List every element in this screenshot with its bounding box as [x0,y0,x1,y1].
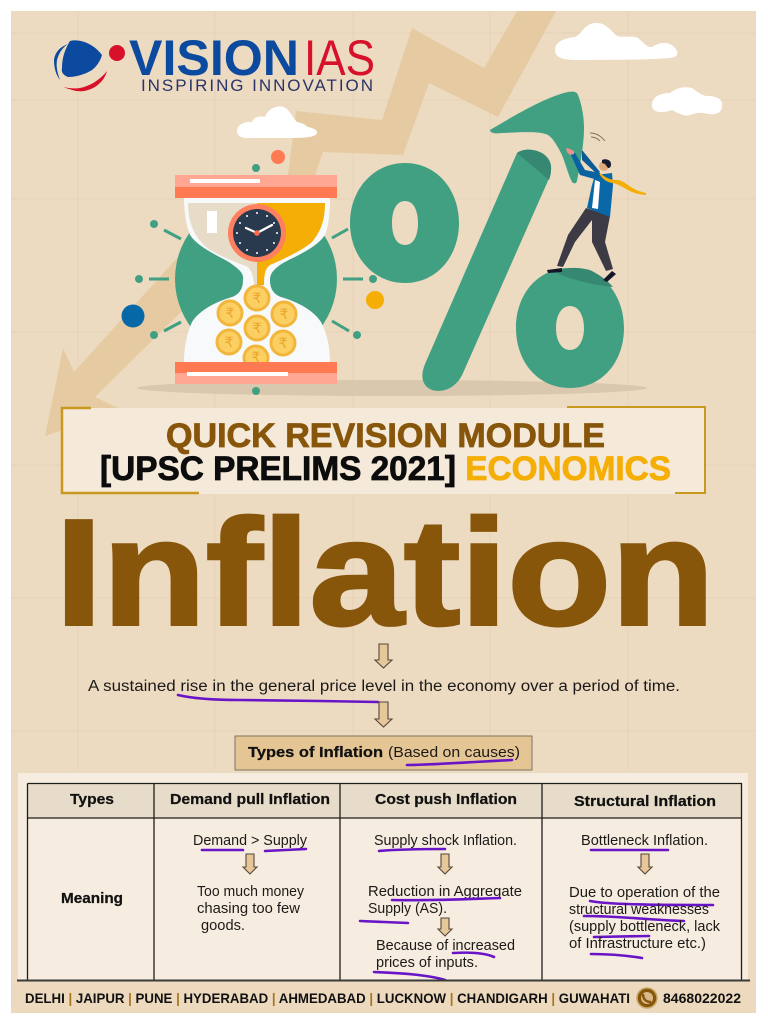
cost push cell: prices of inputs. [376,954,478,971]
glare [207,211,217,233]
structural cell: of Infrastructure etc.) [569,935,706,952]
header: structural: Structural Inflation [574,793,716,810]
title banner [62,407,706,494]
demand pull cell: chasing too few [197,900,300,917]
arrow down 1 [375,644,392,668]
structural cell: Bottleneck Inflation. [581,832,708,849]
definition text: A sustained rise in the general price level in the economy over a period of time. [88,678,680,695]
back arm [582,150,600,174]
coins: ₹ [279,336,288,352]
decorative dots and ticks around hourglass [122,150,384,395]
front arm [570,153,600,180]
types of inflation label [235,736,532,770]
cost push cell: Supply (AS). [368,900,447,917]
demand pull cell: Demand > Supply [193,832,307,849]
structural cell: structural weaknesses [569,901,709,918]
logo: Vision IAS [54,30,375,95]
cost push cell [360,832,522,980]
cost push cell: Reduction in Aggregate [368,883,522,900]
percent slash [422,150,551,391]
cloud top right [555,23,677,60]
icon: phone [637,988,657,1008]
header: types: Types [70,791,114,808]
sand left [188,203,257,285]
arrow tip [490,92,584,183]
structural cell: (supply bottleneck, lack [569,918,720,935]
coins: ₹ [280,307,289,323]
coins [217,286,296,370]
businessman [547,133,646,287]
row label: meaning: Meaning [61,890,123,907]
slash fold shadow [517,150,551,180]
cloud left [237,106,317,138]
header: demand pull: Demand pull Inflation [170,791,330,808]
percent lower circle [516,268,624,388]
heading line 2: [UPSC PRELIMS 2021] ECONOMICS [100,450,671,488]
ground shadow [137,380,647,396]
table backing panel [18,773,748,981]
structural cell [569,832,720,958]
trousers [557,208,613,271]
header: cost push: Cost push Inflation [375,791,517,808]
demand pull cell: Too much money [197,883,304,900]
head [599,161,609,171]
types of inflation label: Types of Inflation [248,744,383,761]
main title: Inflation: Inflation [55,489,715,657]
types of inflation label: (Based on causes) [388,744,520,761]
hair [602,159,611,168]
logo: Vision IAS: IAS [304,30,375,86]
percent upper circle [350,163,459,283]
shoes [547,268,616,282]
cloud right [652,87,722,116]
green circle behind hourglass [175,198,337,360]
coins: ₹ [252,350,261,366]
header row [28,784,742,818]
clock [228,204,286,262]
table: types of inflation [28,784,742,981]
tie [600,173,646,195]
coins: ₹ [253,321,262,337]
glass body [184,198,330,362]
logo: Vision IAS: INSPIRING INNOVATION [141,76,373,95]
hourglass with clock and coins [175,175,337,384]
structural cell: Due to operation of the [569,884,720,901]
jacket [587,173,613,217]
footer bar [11,980,756,1013]
cost push cell: Because of increased [376,937,515,954]
demand pull cell [193,832,307,934]
footer phone number: 8468022022 [663,990,741,1006]
bottom cap [175,362,337,384]
coins: ₹ [225,335,234,351]
logo: Vision IAS: VISION [129,30,299,86]
shirt [592,180,600,209]
heading line 1: QUICK REVISION MODULE [166,417,605,455]
footer cities: DELHI | JAIPUR | PUNE | HYDERABAD | AHMEDABAD | LUCKNOW | CHANDIGARH | GUWAHATI [25,990,630,1006]
cost push cell: Supply shock Inflation. [374,832,517,849]
top cap [175,175,337,198]
hand [566,148,574,155]
coins: ₹ [226,306,235,322]
background zigzag arrow [45,11,556,436]
demand pull cell: goods. [201,917,245,934]
percent sign with arrow [350,92,646,391]
foot shadow [555,268,613,287]
coins: ₹ [253,291,262,307]
motion lines [590,133,605,141]
arrow down 2 [375,702,392,727]
sand right [257,203,325,285]
definition underline [178,695,378,702]
